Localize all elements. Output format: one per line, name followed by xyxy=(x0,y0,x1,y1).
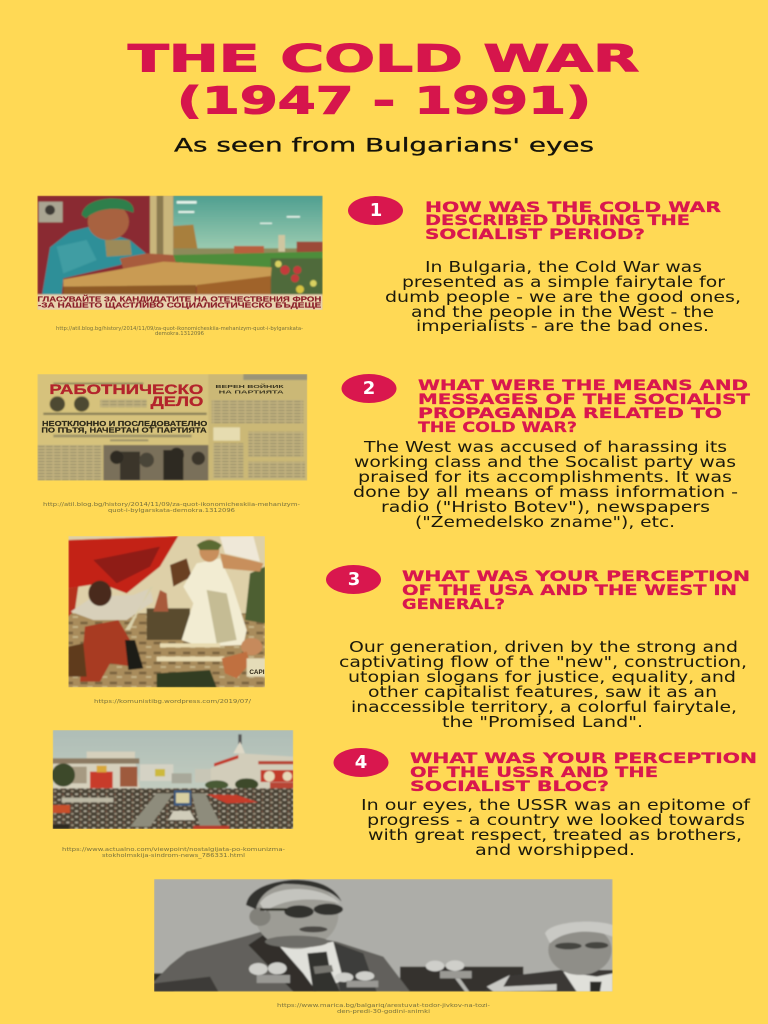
text block: answer 4: In our eyes, the USSR was an epitome of xyxy=(361,796,751,814)
text block: answer 1: dumb people - we are the good ones, xyxy=(385,288,741,306)
text block: answer 1: and the people in the West - the xyxy=(411,303,714,321)
subtitle: As seen from Bulgarians' eyes xyxy=(174,136,594,156)
panel: question 2 xyxy=(37,374,750,531)
caption: source 4: https://www.actualno.com/viewpoint/nostalgijata-po-komunizma- xyxy=(62,847,285,853)
image: newspaper: НЕОТКЛОННО И ПОСЛЕДОВАТЕЛНО xyxy=(42,421,208,428)
image: election poster: ГЛАСУВАЙТЕ ЗА КАНДИДАТИТЕ НА ОТЕЧЕСТВЕНИЯ ФРОН xyxy=(37,294,321,303)
panel: closing photo xyxy=(154,879,613,1015)
text block: answer 2: ("Zemedelsko zname"), etc. xyxy=(415,513,675,531)
text block: answer 3: inaccessible territory, a colorful fairytale, xyxy=(351,698,737,716)
title xyxy=(128,38,639,122)
heading: question 3 xyxy=(402,569,750,613)
caption: source 5 xyxy=(277,1003,490,1015)
caption: source 1 xyxy=(56,326,303,337)
text block: answer 2: praised for its accomplishments. It was xyxy=(358,468,732,486)
title: THE COLD WAR xyxy=(128,38,639,80)
text block: answer 2 xyxy=(353,438,738,531)
image: speaker at microphones xyxy=(154,879,613,992)
text block: answer 3: the "Promised Land". xyxy=(442,713,643,731)
heading: question 3: WHAT WAS YOUR PERCEPTION xyxy=(402,569,750,585)
text block: answer 3: other capitalist features, saw it as an xyxy=(368,683,717,701)
text block: answer 4: with great respect, treated as brothers, xyxy=(368,826,742,844)
caption: source 2: quot-i-bylgarskata-demokra.1312096 xyxy=(108,508,236,514)
caption: source 2: http://atil.blog.bg/history/2014/11/09/za-quot-ikonomicheskiia-mehanizym- xyxy=(43,502,300,508)
image: newspaper: ДЕЛО xyxy=(151,394,204,409)
text block: answer 1: In Bulgaria, the Cold War was xyxy=(425,258,702,276)
text block: answer 4: and worshipped. xyxy=(475,841,635,859)
image: revolutionary painting: CAPI xyxy=(249,669,265,676)
text block: answer 4: progress - a country we looked towards xyxy=(367,811,745,829)
caption: source 5: den-predi-30-godini-snimki xyxy=(337,1009,431,1015)
panel: question 1 xyxy=(37,196,741,337)
heading: question 3: GENERAL? xyxy=(402,597,505,613)
image: revolutionary painting xyxy=(68,536,265,687)
text block: answer 3 xyxy=(339,638,747,731)
heading: question 4: SOCIALIST BLOC? xyxy=(410,779,609,795)
text block: answer 3: Our generation, driven by the strong and xyxy=(349,638,738,656)
image: election poster xyxy=(37,196,323,310)
heading: question 2: THE COLD WAR? xyxy=(418,420,577,436)
text block: answer 1: imperialists - are the bad ones. xyxy=(416,317,709,335)
text block: answer 3: captivating flow of the "new", construction, xyxy=(339,653,747,671)
image: newspaper: ВЕРЕН ВОЙНИК xyxy=(215,382,284,389)
badge: number 2 xyxy=(342,374,396,403)
image: election poster: -ЗА НАШЕТО ЩАСТЛИВО СОЦИАЛИСТИЧЕСКО БЪДЕЩЕ xyxy=(38,303,322,310)
heading: question 2: MESSAGES OF THE SOCIALIST xyxy=(418,392,750,408)
caption: source 4: stokholmskija-sindrom-news_786331.html xyxy=(102,853,246,859)
badge: number 1 xyxy=(348,196,403,225)
badge: number 1: 1 xyxy=(370,200,382,221)
heading: question 4: OF THE USSR AND THE xyxy=(410,765,658,781)
text block: answer 1 xyxy=(385,258,741,335)
badge: number 4 xyxy=(334,748,388,777)
heading: question 2: WHAT WERE THE MEANS AND xyxy=(418,378,748,394)
text block: answer 3: utopian slogans for justice, equality, and xyxy=(348,668,736,686)
image: newspaper: ПО ПЪТЯ, НАЧЕРТАН ОТ ПАРТИЯТА xyxy=(41,428,207,435)
caption: source 3: https://komunistibg.wordpress.com/2019/07/ xyxy=(94,699,251,705)
badge: number 3: 3 xyxy=(348,569,360,590)
heading: question 1 xyxy=(425,200,721,243)
badge: number 3 xyxy=(326,565,381,594)
heading: question 1: SOCIALIST PERIOD? xyxy=(425,227,645,243)
image: square parade xyxy=(52,730,293,829)
caption: source 1: http://atil.blog.bg/history/2014/11/09/za-quot-ikonomicheskiia-mehanizym-quot-i-bylgarskata- xyxy=(56,326,303,332)
caption: source 1: demokra.1312096 xyxy=(155,331,204,337)
caption: source 2 xyxy=(43,502,300,514)
text block: answer 2: The West was accused of harassing its xyxy=(363,438,727,456)
text block: answer 4 xyxy=(361,796,751,859)
heading: question 3: OF THE USA AND THE WEST IN xyxy=(402,583,737,599)
heading: question 1: DESCRIBED DURING THE xyxy=(425,213,690,229)
caption: source 4 xyxy=(62,847,285,859)
heading: question 4 xyxy=(410,751,757,795)
heading: question 2: PROPAGANDA RELATED TO xyxy=(418,406,722,422)
text block: answer 2: working class and the Socalist party was xyxy=(354,453,736,471)
badge: number 4: 4 xyxy=(355,752,367,773)
text block: answer 2: radio ("Hristo Botev"), newspapers xyxy=(381,498,710,516)
image: newspaper: НА ПАРТИЯТА xyxy=(219,389,285,394)
panel: question 4 xyxy=(52,730,757,859)
heading: question 1: HOW WAS THE COLD WAR xyxy=(425,200,721,216)
caption: source 5: https://www.marica.bg/balgariq/arestuvat-todor-jivkov-na-tozi- xyxy=(277,1003,490,1009)
badge: number 2: 2 xyxy=(363,378,375,399)
text block: answer 1: presented as a simple fairytale for xyxy=(402,273,726,291)
image: newspaper xyxy=(37,374,307,481)
image: newspaper: РАБОТНИЧЕСКО xyxy=(49,382,204,397)
heading: question 4: WHAT WAS YOUR PERCEPTION xyxy=(410,751,757,767)
heading: question 2 xyxy=(418,378,750,436)
title: (1947 - 1991) xyxy=(177,80,591,122)
text block: answer 2: done by all means of mass information - xyxy=(353,483,738,501)
panel: question 3 xyxy=(68,536,750,731)
